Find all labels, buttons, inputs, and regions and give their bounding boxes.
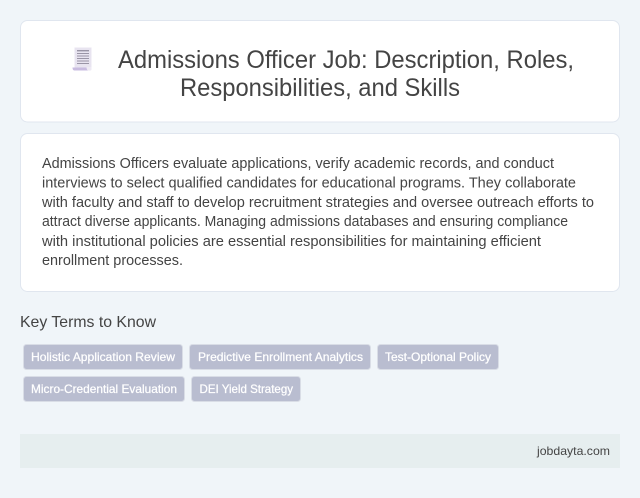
tag: micro-credential evaluation: Micro-Credential Evaluation [31, 382, 177, 396]
panel: header [20, 20, 620, 122]
title: Responsibilities, and Skills [180, 74, 460, 102]
title [118, 46, 574, 102]
tag: predictive enrollment analytics [190, 344, 370, 370]
footer: source: jobdayta.com [536, 444, 610, 458]
tag: test-optional policy [378, 344, 498, 370]
panel: description [20, 134, 620, 292]
icon: document scroll [72, 48, 92, 71]
tag: predictive enrollment analytics: Predictive Enrollment Analytics [198, 350, 363, 364]
text block: description: interviews to select qualified candidates for educational programs. They collaborate [42, 176, 576, 192]
heading: key terms: Key Terms to Know [20, 314, 156, 331]
footer [20, 434, 620, 468]
tag: holistic application review: Holistic Application Review [31, 350, 175, 364]
tags: key terms [24, 344, 498, 402]
text block: description: Admissions Officers evaluate applications, verify academic records, and conduct [42, 156, 554, 172]
tag: dei yield strategy [192, 376, 300, 402]
tag: micro-credential evaluation [24, 376, 184, 402]
text block: description [41, 156, 594, 269]
title: Admissions Officer Job: Description, Roles, [118, 46, 574, 74]
text block: description: with institutional policies are essential responsibilities for maintaining efficient [41, 234, 541, 250]
text block: description: enrollment processes. [42, 253, 183, 269]
text block: description: attract diverse applicants. Managing admissions databases and ensuring compliance [42, 214, 568, 230]
tag: test-optional policy: Test-Optional Policy [385, 350, 491, 364]
tag: holistic application review [24, 344, 182, 370]
text block: description: with faculty and staff to develop recruitment strategies and oversee outreach efforts to [41, 195, 594, 211]
tag: dei yield strategy: DEI Yield Strategy [200, 382, 293, 396]
